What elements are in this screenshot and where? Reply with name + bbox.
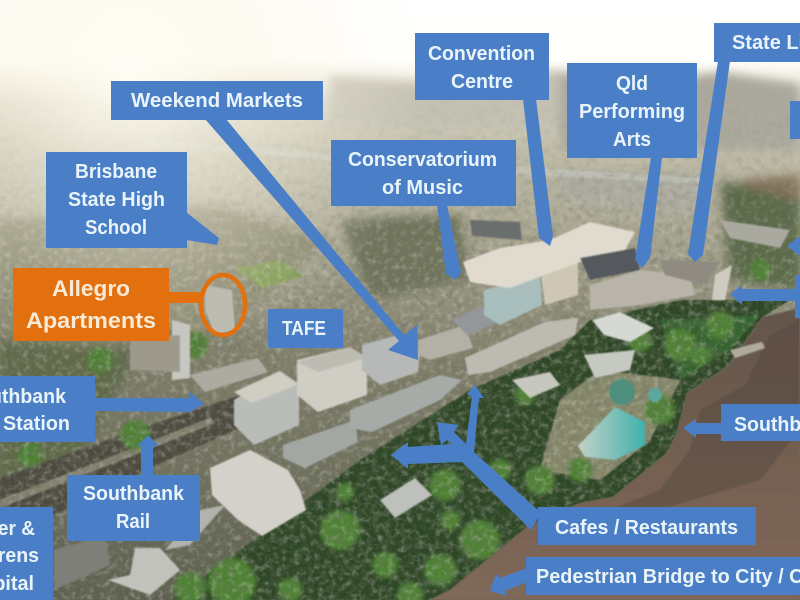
ring: Allegro Apartments location xyxy=(201,275,245,335)
sports field xyxy=(234,260,306,288)
label: Southbank Rail xyxy=(67,435,200,541)
label: Southbank Rail: Southbank xyxy=(83,483,185,505)
apartments xyxy=(205,285,235,335)
arrow: Brisbane State High School xyxy=(186,212,219,245)
box: Pedestrian Bridge to City xyxy=(526,557,800,595)
label: TAFE: TAFE xyxy=(282,318,326,340)
label: right edge box xyxy=(790,101,800,139)
railway corridor xyxy=(0,388,275,530)
label: Convention Centre: Convention xyxy=(428,43,535,65)
arrow: Conservatorium of Music xyxy=(437,205,461,280)
box: State Library xyxy=(714,23,800,62)
label: Brisbane State High School xyxy=(46,152,219,248)
arrow: Convention Centre xyxy=(523,99,553,246)
label: Qld Performing Arts: Performing xyxy=(579,101,685,123)
label: Convention Centre: Centre xyxy=(451,71,513,93)
river xyxy=(430,308,800,600)
label: Allegro Apartments: Allegro xyxy=(52,276,130,301)
jetty xyxy=(730,342,765,358)
label: Conservatorium of Music: of Music xyxy=(382,177,463,199)
label: Qld Performing Arts: Qld xyxy=(616,73,648,95)
label: Southbank Beach xyxy=(683,404,800,441)
label: Brisbane State High School: School xyxy=(85,217,147,239)
label: Southbank Station: Station xyxy=(3,413,70,435)
box: Cafes / Restaurants xyxy=(538,507,756,545)
arrow: Southbank Rail xyxy=(137,435,159,476)
label: TAFE xyxy=(268,309,343,348)
box: Convention Centre xyxy=(415,33,549,100)
label: Conservatorium of Music: Conservatorium xyxy=(348,149,497,171)
box: Conservatorium of Music xyxy=(331,140,516,206)
river in distance xyxy=(145,140,700,184)
connector: Allegro Apartments xyxy=(168,292,202,303)
box: Weekend Markets xyxy=(111,81,323,120)
label: Qld Performing Arts xyxy=(567,63,697,268)
label: Brisbane State High School: Brisbane xyxy=(75,161,157,183)
box: Southbank Station xyxy=(0,376,95,442)
label: Cafes / Restaurants xyxy=(391,385,756,545)
label: Cafes / Restaurants: Cafes / Restaurants xyxy=(555,517,738,539)
label: Conservatorium of Music xyxy=(331,140,516,280)
label: Convention Centre xyxy=(415,33,553,246)
trees xyxy=(18,259,771,600)
city texture xyxy=(0,129,800,600)
label: Weekend Markets: Weekend Markets xyxy=(131,90,303,112)
box: Allegro Apartments xyxy=(13,268,169,341)
arrow: right edge top xyxy=(787,236,800,256)
label: Allegro Apartments: Apartments xyxy=(26,308,156,333)
water feature xyxy=(609,379,635,405)
office blocks xyxy=(234,372,299,445)
label: Southbank Rail: Rail xyxy=(116,511,150,533)
arrows: Cafes / Restaurants xyxy=(391,385,541,530)
label: Mater and Childrens Hospital xyxy=(0,507,53,600)
box: Qld Performing Arts xyxy=(567,63,697,158)
label: Brisbane State High School: State High xyxy=(68,189,165,211)
hazy sun glow xyxy=(0,0,800,330)
label: Qld Performing Arts: Arts xyxy=(613,129,651,151)
riverside parkland xyxy=(170,300,790,600)
box: Southbank Beach xyxy=(721,404,800,441)
box: Southbank Rail xyxy=(67,475,200,541)
arrow: Qld Performing Arts xyxy=(635,157,662,268)
arrow: right edge middle xyxy=(730,275,800,318)
box: Brisbane State High School xyxy=(46,152,187,248)
label: Weekend Markets xyxy=(111,81,418,360)
arrow: Pedestrian Bridge to City xyxy=(490,568,527,596)
convention centre roof xyxy=(463,222,635,288)
arrow: State Library xyxy=(688,61,730,262)
arrow: Southbank Station xyxy=(94,392,204,412)
arrow: Southbank Beach xyxy=(683,419,722,438)
label: Allegro Apartments xyxy=(13,268,245,341)
label: Southbank Station xyxy=(0,376,204,442)
arrow: Weekend Markets xyxy=(205,119,418,360)
label: State Library xyxy=(688,23,800,262)
label: Pedestrian Bridge to City xyxy=(490,557,800,596)
